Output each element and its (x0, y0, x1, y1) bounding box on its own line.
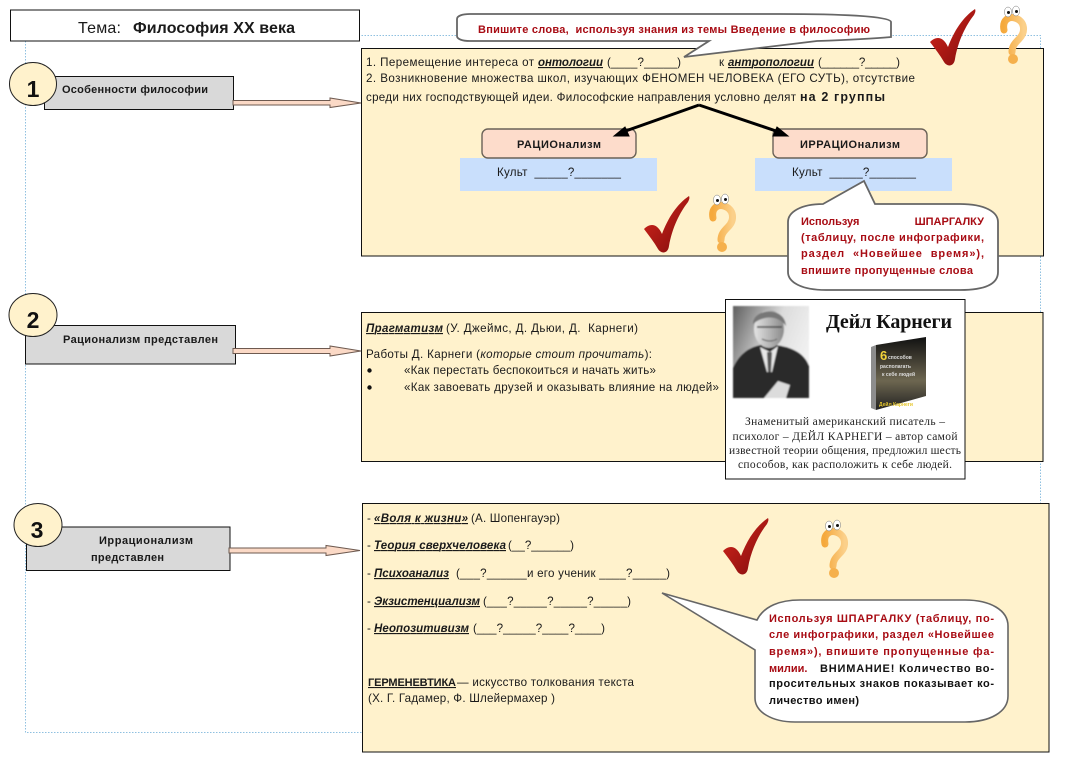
heading: rationalism (482, 129, 636, 158)
panel: section 3 content: - (367, 512, 371, 525)
arrow 2 (233, 346, 361, 356)
arrow: to irrationalism (699, 105, 782, 133)
description: психолог – ДЕЙЛ КАРНЕГИ – автор самой (732, 429, 958, 443)
blue box: rationalism cult (460, 158, 657, 191)
label 1 box (44, 76, 234, 110)
callout: section 3 hint: время»), впишите пропущенные фа- (769, 646, 994, 658)
heading: irrationalism: ИРРАЦИОнализм (800, 139, 900, 151)
label 3 box: Иррационализм (99, 535, 193, 547)
panel: section 3 content: Теория сверхчеловека (374, 540, 507, 552)
text: line 1: к (719, 56, 725, 69)
portrait (733, 306, 809, 398)
panel: section 3 content: (__?______) (508, 539, 574, 552)
arrowhead: to rationalism (614, 127, 629, 136)
text: line 1: антропологии (728, 57, 814, 69)
panel: section 2 content: «Как завоевать друзей и оказывать влияние на людей» (404, 381, 719, 394)
panel: section 2 content: «Как перестать беспокоиться и начать жить» (404, 364, 656, 377)
icon: question mark section 1 (713, 194, 733, 252)
callout: section 3 hint: Используя ШПАРГАЛКУ (таблицу, по- (769, 613, 994, 625)
text: line 2: 2. Возникновение множества школ, изучающих ФЕНОМЕН ЧЕЛОВЕКА (ЕГО СУТЬ), отсутствие (366, 72, 915, 85)
panel: section 3 content: (___?______и его ученик ____?_____) (456, 567, 670, 580)
callout: top instruction: Впишите слова, используя знания из темы Введение в философию (478, 24, 870, 36)
icon: question mark section 3 (825, 520, 845, 578)
panel: section 2 content (362, 312, 1043, 462)
book: располагать (880, 364, 911, 370)
label 2 box: Рационализм представлен (63, 334, 218, 346)
blue box: irrationalism cult: Культ _____?_______ (792, 166, 917, 179)
title: Философия XX века (133, 20, 295, 37)
book: к себе людей (882, 371, 915, 378)
arrow 3 (229, 546, 360, 556)
callout: section 1 hint: впишите пропущенные слова (801, 265, 974, 277)
callout: section 1 hint: (таблицу, после инфографики, (801, 232, 984, 244)
book: способов (888, 354, 912, 361)
panel: section 2 content: (У. Джеймс, Д. Дьюи, Д. Карнеги) (446, 322, 638, 335)
text: line 1: 1. Перемещение интереса от (366, 56, 535, 69)
callout: section 3 hint: просительных знаков показывает ко- (769, 678, 994, 690)
panel: section 3 content (362, 504, 1049, 752)
panel: section 3 content: Экзистенциализм (374, 596, 480, 608)
panel: section 3 content: - (367, 539, 371, 552)
panel: section 3 content: (Х. Г. Гадамер, Ф. Шлейермахер ) (368, 692, 555, 705)
title (10, 10, 360, 41)
book: Дейл Карнеги (879, 401, 913, 408)
callout: section 3 hint: личество имен) (769, 695, 859, 707)
callout: section 1 hint (788, 181, 998, 290)
arrowhead: to irrationalism (773, 127, 788, 136)
panel: section 2 content: Работы Д. Карнеги (которые стоит прочитать): (366, 348, 652, 361)
heading: rationalism: РАЦИОнализм (517, 139, 601, 151)
panel: section 3 content: «Воля к жизни» (374, 513, 469, 525)
panel: section 3 content: (___?_____?____?____) (473, 622, 605, 635)
icon: question mark top (1004, 6, 1024, 64)
number badge 1 (10, 62, 56, 106)
text: line 3: на 2 группы (800, 90, 885, 104)
heading: Дейл Карнеги (826, 311, 952, 333)
callout: section 3 hint: милии. (769, 663, 807, 675)
text: line 1 (366, 56, 900, 69)
icon: check mark section 3 (723, 518, 768, 574)
callout: section 1 hint: Используя (801, 216, 859, 228)
description (729, 416, 961, 471)
panel: section 3 content: (___?_____?_____?_____) (483, 595, 631, 608)
callout: section 3 hint (662, 593, 1008, 722)
callout: section 3 hint: ВНИМАНИЕ! Количество во- (820, 663, 994, 675)
blue box: rationalism cult: Культ _____?_______ (497, 166, 622, 179)
callout: top instruction (457, 14, 891, 57)
panel: section 3 content: - (367, 567, 371, 580)
callout: section 1 hint: раздел «Новейшее время»), (801, 248, 984, 260)
panel: section 1 content (362, 48, 1044, 256)
number badge 1: 1 (27, 76, 40, 102)
label 3 box: представлен (91, 552, 164, 564)
icon: check mark top (930, 9, 975, 65)
panel: section 3 content: — искусство толкования текста (457, 676, 635, 689)
callout: section 3 hint: сле инфографики, раздел «Новейшее (769, 629, 994, 641)
heading: irrationalism (773, 129, 927, 158)
number badge 2 (9, 294, 57, 336)
text: line 3: среди них господствующей идеи. Философские направления условно делят (366, 91, 797, 104)
book: 6 (880, 348, 887, 363)
text: line 1: (____?_____) (607, 56, 681, 69)
blue box: irrationalism cult (755, 158, 952, 191)
title: Тема: (78, 20, 121, 37)
panel: section 3 content: - (367, 595, 371, 608)
panel: section 3 content: ГЕРМЕНЕВТИКА (368, 677, 456, 689)
text: line 1: (______?_____) (818, 56, 900, 69)
label 2 box (26, 326, 236, 364)
number badge 2: 2 (27, 307, 39, 333)
book (871, 337, 926, 410)
number badge 3 (14, 504, 62, 546)
description: Знаменитый американский писатель – (745, 416, 945, 428)
arrow 1 (233, 98, 361, 108)
panel: section 3 content: - (367, 622, 371, 635)
panel: section 3 content: Психоанализ (374, 568, 449, 580)
label 1 box: Особенности философии (62, 84, 208, 96)
description: способов, как расположить к себе людей. (738, 459, 952, 471)
panel: section 3 content: (А. Шопенгауэр) (471, 512, 560, 525)
callout: section 1 hint: ШПАРГАЛКУ (915, 216, 984, 228)
panel: section 3 content: Неопозитивизм (374, 623, 469, 635)
arrow: to rationalism (620, 105, 699, 133)
text: line 1: онтологии (538, 57, 603, 69)
label 3 box (26, 527, 230, 570)
icon: check mark section 1 (644, 196, 689, 252)
panel: Dale Carnegie card (726, 300, 965, 479)
panel: section 2 content: Прагматизм (366, 323, 443, 335)
description: известной теории общения, предложил шесть (729, 445, 961, 457)
number badge 3: 3 (31, 517, 43, 543)
